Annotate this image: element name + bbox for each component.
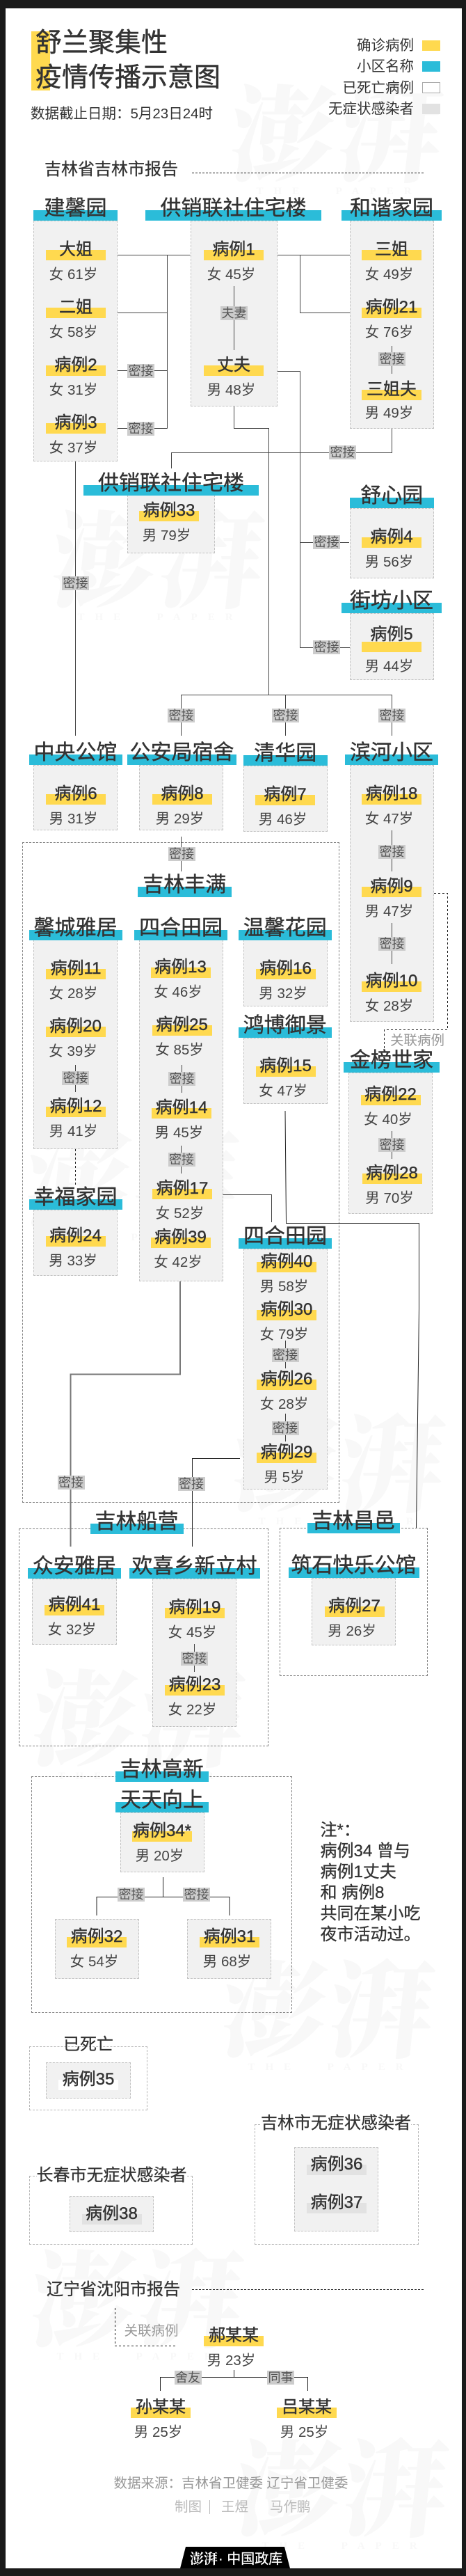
- case: 病例29: 男 5岁: [264, 1469, 305, 1485]
- connector: 供销联社 down to third row: [181, 406, 392, 736]
- label 吉林市无症状感染者: 吉林市无症状感染者: [261, 2113, 411, 2133]
- box: 公安局宿舍: [139, 765, 223, 830]
- case: 二姐: 二姐: [59, 298, 93, 317]
- case: 病例24: [46, 1226, 106, 1269]
- case: 病例13: 病例13: [154, 958, 207, 976]
- case: 病例1: 病例1: [212, 240, 255, 259]
- case: 二姐: 女 58岁: [49, 324, 97, 340]
- tag 夫妻: 夫妻: [221, 306, 246, 320]
- header: 吉林昌邑: 吉林昌邑: [312, 1509, 395, 1533]
- case: 病例28: 病例28: [366, 1164, 418, 1183]
- case: 病例13: 女 46岁: [154, 984, 202, 999]
- box: 幸福家园: [33, 1210, 118, 1276]
- box: 病例38: [70, 2195, 154, 2232]
- case: 丈夫: 男 48岁: [207, 382, 255, 398]
- data source: 数据来源：吉林省卫健委 辽宁省卫健委: [114, 2476, 348, 2491]
- case: 病例15: [256, 1057, 316, 1099]
- header: 馨城雅居: 馨城雅居: [33, 916, 117, 940]
- case: 病例33: [139, 501, 199, 543]
- case: 病例20: 女 39岁: [49, 1043, 97, 1059]
- case: 病例2: [46, 356, 106, 398]
- case: 病例31: 男 68岁: [203, 1953, 251, 1970]
- tag 密接: 密接: [128, 364, 153, 378]
- note: 病例1丈夫: [320, 1863, 396, 1881]
- case: 病例38 asymptomatic: 病例38: [86, 2204, 138, 2223]
- case: 病例16: [256, 959, 316, 1002]
- case: 病例4: 男 56岁: [365, 554, 413, 569]
- dotted rule: [192, 2289, 424, 2290]
- case: 病例34*: 病例34*: [133, 1821, 191, 1840]
- case: 病例30: 女 79岁: [260, 1327, 308, 1342]
- connector: 馨城雅居 to 幸福家园: [75, 1149, 77, 1185]
- title: 疫情传播示意图: [35, 63, 220, 92]
- case: 病例12: [46, 1097, 106, 1139]
- case: 病例23: 女 22岁: [168, 1701, 216, 1718]
- box: 滨河小区: [350, 765, 434, 1022]
- tag 密接: 密接: [380, 709, 405, 722]
- legend: 小区名称: [357, 58, 414, 74]
- box: 金榜世家: [348, 1073, 433, 1214]
- case: 病例15: 病例15: [259, 1057, 312, 1075]
- header: 天天向上: 天天向上: [120, 1789, 204, 1812]
- legend: 确诊病例: [357, 38, 414, 54]
- box: 中央公馆: [33, 765, 118, 830]
- note: 注*：: [320, 1821, 360, 1840]
- case: 病例18: [362, 784, 421, 827]
- case: 病例6: 男 31岁: [49, 811, 97, 827]
- tag 密接: 密接: [380, 937, 405, 951]
- footer tab: 澎湃: [190, 2547, 218, 2568]
- header: 滨河小区: 滨河小区: [350, 741, 433, 764]
- header: 幸福家园: 幸福家园: [33, 1186, 117, 1209]
- header: 建馨园: 建馨园: [45, 197, 107, 220]
- credits: [175, 2497, 314, 2517]
- tag 密接: 密接: [330, 445, 355, 459]
- tag 密接: 密接: [63, 1071, 88, 1085]
- tag 密接: 密接: [182, 1652, 207, 1666]
- header: 清华园: 清华园: [254, 742, 316, 765]
- case: 郝某某: [204, 2325, 264, 2369]
- case: 病例18: 病例18: [366, 784, 417, 803]
- case: 病例29: 病例29: [261, 1443, 312, 1462]
- case: 病例34*: [132, 1821, 192, 1865]
- header: 吉林高新: 吉林高新: [120, 1758, 204, 1781]
- note: 病例34 曾与: [320, 1842, 410, 1860]
- box: 天天向上: [120, 1812, 204, 1872]
- case: 病例17: 病例17: [156, 1179, 208, 1198]
- connector: 建馨园 to 中央公馆: [75, 461, 77, 736]
- case: 病例19: [165, 1597, 225, 1641]
- case: 病例22: 女 40岁: [364, 1112, 412, 1128]
- tag 密接: 密接: [273, 1421, 298, 1435]
- case: 病例12: 男 41岁: [49, 1123, 97, 1139]
- connector: 关联病例 滨河 to 金榜世家: [384, 894, 448, 1049]
- case: 病例41: [45, 1594, 104, 1638]
- box: 建馨园: [33, 221, 118, 461]
- case: 病例11: 女 28岁: [49, 986, 97, 1002]
- header: 供销联社住宅楼 2: 供销联社住宅楼: [98, 472, 244, 495]
- note: 和 病例8: [320, 1883, 385, 1902]
- connector: 关联病例 沈阳: [115, 2308, 175, 2346]
- case: 病例31: [200, 1927, 259, 1971]
- section heading: 吉林: 吉林省吉林市报告: [45, 160, 178, 179]
- case: 病例6: 病例6: [54, 784, 97, 803]
- case: 病例39: [151, 1228, 211, 1270]
- case: 病例13: [151, 958, 211, 999]
- connector: 病例34 to 病例32 and 31: [97, 1877, 230, 1915]
- tag 密接: 密接: [314, 640, 339, 654]
- case: 病例16: 病例16: [259, 959, 312, 978]
- case: 病例26: 女 28岁: [260, 1396, 308, 1412]
- tag 密接: 密接: [169, 1153, 194, 1167]
- case: 病例20: 病例20: [49, 1017, 102, 1036]
- header: 和谐家园: 和谐家园: [350, 197, 433, 220]
- box: 筑石快乐公馆: [312, 1578, 396, 1645]
- connector: 病例29 to 欢喜乡新立村: [192, 1459, 240, 1547]
- box: 病例31: [187, 1918, 271, 1979]
- case: 病例27: 病例27: [328, 1597, 380, 1615]
- tag 密接: 密接: [58, 1476, 83, 1490]
- tag 密接: 密接: [118, 1888, 143, 1902]
- case: 病例12: 病例12: [50, 1097, 102, 1115]
- connector: 公安局宿舍 to 吉林丰满: [181, 837, 182, 871]
- case: 病例2: 病例2: [54, 356, 97, 374]
- case: 病例28: [362, 1163, 421, 1208]
- case: 病例25: 病例25: [156, 1015, 208, 1034]
- case: 病例7: 病例7: [264, 785, 307, 803]
- case: 病例33: 病例33: [143, 501, 195, 519]
- watermark 1: THE PAPER: [256, 186, 422, 197]
- watermark 2: THE PAPER: [77, 612, 243, 623]
- box: 众安雅居: [32, 1579, 117, 1644]
- case: 吕某某: 吕某某: [282, 2397, 332, 2417]
- case: 丈夫: 丈夫: [217, 356, 250, 374]
- container: 已死亡: [29, 2046, 147, 2110]
- container: 吉林船营: [18, 1528, 268, 1746]
- case: 病例8: [152, 784, 212, 827]
- tag 密接: 密接: [380, 845, 405, 859]
- case: 病例20: [46, 1017, 106, 1059]
- case: 病例30: [257, 1299, 316, 1343]
- case: 大姐: [46, 240, 106, 283]
- case: 病例21: 女 76岁: [365, 324, 413, 340]
- case: 病例6: [46, 784, 106, 827]
- case: 病例14: [152, 1098, 211, 1141]
- case: 孙某某: 男 25岁: [134, 2424, 182, 2440]
- case: 三姐夫: 男 49岁: [365, 405, 413, 421]
- case: 病例27: 男 26岁: [328, 1623, 376, 1639]
- case: 病例39: 病例39: [154, 1228, 207, 1246]
- case: 病例32: [67, 1927, 127, 1971]
- case: 病例28: 男 70岁: [365, 1190, 414, 1206]
- case: 三姐: 三姐: [375, 240, 408, 259]
- tag 密接: 密接: [380, 352, 405, 366]
- tag 密接: 密接: [273, 1348, 298, 1361]
- credits: 王煜: [221, 2499, 248, 2515]
- tag 密接: 密接: [380, 1138, 405, 1152]
- case: 孙某某: [131, 2397, 191, 2442]
- case: 病例34*: 男 20岁: [136, 1847, 184, 1864]
- legend: 无症状感染者: [328, 101, 414, 117]
- header: 清华园: [243, 741, 328, 766]
- case: 病例19: 女 45岁: [168, 1625, 216, 1640]
- case: 病例25: [152, 1015, 212, 1058]
- case: 孙某某: 孙某某: [136, 2397, 186, 2417]
- connector: 鸿博御景 to 吉林昌邑: [285, 1111, 419, 1528]
- case: 郝某某: 郝某某: [209, 2326, 259, 2344]
- header: 四合田园 lower: 四合田园: [243, 1225, 327, 1248]
- credits: 制图: [175, 2499, 202, 2515]
- header: 街坊小区: 街坊小区: [350, 589, 433, 613]
- case: 病例41: 女 32岁: [48, 1622, 96, 1637]
- case: 大姐: 女 61岁: [49, 267, 97, 283]
- case: 病例4: [362, 528, 421, 569]
- case: 病例16: 男 32岁: [259, 986, 307, 1002]
- case: 吕某某: 男 25岁: [280, 2424, 328, 2440]
- watermark 4: THE PAPER: [258, 1516, 424, 1527]
- header: 金榜世家: 金榜世家: [350, 1049, 433, 1072]
- title: 舒兰聚集性: [35, 29, 168, 58]
- credits: 马作鹏: [270, 2499, 311, 2515]
- case: 病例40: 病例40: [261, 1251, 312, 1271]
- box: 温馨花园: [243, 940, 328, 1006]
- case: 病例23: 病例23: [169, 1675, 220, 1694]
- case: 病例10: 女 28岁: [365, 998, 413, 1014]
- case: 病例5: 男 44岁: [365, 658, 413, 674]
- case: 病例33: 男 79岁: [143, 528, 191, 543]
- case: 病例24: 病例24: [49, 1226, 102, 1245]
- box: 病例35: [46, 2062, 131, 2099]
- case: 三姐: 女 49岁: [365, 267, 413, 283]
- case: 病例24: 男 33岁: [49, 1253, 97, 1269]
- box: 舒心园: [350, 508, 434, 578]
- case: 病例21: 病例21: [366, 298, 417, 317]
- case: 病例1: [204, 240, 264, 283]
- box: 欢喜乡新立村: [152, 1579, 236, 1726]
- case: 病例29: [257, 1442, 316, 1487]
- case: 病例23: [165, 1675, 225, 1719]
- label 长春市无症状感染者: 长春市无症状感染者: [36, 2166, 186, 2185]
- title highlight: [31, 31, 50, 90]
- label 已死亡: 已死亡: [63, 2035, 113, 2053]
- case: 病例14: 病例14: [156, 1098, 207, 1117]
- case: 病例32: 病例32: [71, 1927, 122, 1946]
- container: 吉林高新: [31, 1776, 292, 2013]
- header: 中央公馆: 中央公馆: [33, 741, 117, 764]
- case: 病例3: 女 37岁: [49, 440, 97, 456]
- box: 馨城雅居: [33, 940, 118, 1149]
- case: 病例36 asymptomatic: 病例36: [311, 2155, 362, 2173]
- case: 病例22: [360, 1084, 420, 1129]
- label 关联病例 滨河: 关联病例: [390, 1033, 444, 1048]
- watermark 7: THE PAPER: [56, 2351, 223, 2362]
- box: 和谐家园: [350, 221, 434, 429]
- case: 三姐: [362, 240, 421, 283]
- tag 密接: 密接: [184, 1888, 209, 1902]
- case: 病例3: [46, 413, 106, 456]
- title: [35, 29, 220, 92]
- connector: inside boxes: [75, 286, 392, 1672]
- label 关联病例 沈阳: 关联病例: [124, 2323, 179, 2339]
- note: 夜市活动过。: [320, 1925, 420, 1944]
- box: 供销联社: [191, 221, 278, 406]
- case: 病例15: 女 47岁: [259, 1083, 307, 1099]
- case: 大姐: 大姐: [59, 240, 93, 259]
- box: 病例36 37: [294, 2147, 378, 2231]
- case: 郝某某: 男 23岁: [207, 2353, 255, 2368]
- case: 病例8: 男 29岁: [156, 811, 204, 827]
- tag 密接: 密接: [128, 422, 153, 436]
- case: 病例35 deceased: 病例35: [63, 2070, 114, 2088]
- tag 密接: 密接: [168, 709, 193, 722]
- tag 密接: 密接: [179, 1477, 204, 1491]
- connector: 和谐家园 to 病例33: [171, 429, 392, 468]
- case: 病例37 asymptomatic: 病例37: [311, 2192, 362, 2212]
- case: 病例3: 病例3: [54, 413, 97, 432]
- case: 病例7: [255, 785, 315, 827]
- case: 吕某某: [277, 2397, 337, 2442]
- case: 病例1: 女 45岁: [207, 267, 255, 283]
- case: 病例11: [46, 959, 106, 1002]
- header: 舒心园: 舒心园: [360, 484, 423, 507]
- connector: 郝某某 to 孙某某 and 吕某某: [160, 2370, 307, 2391]
- case: 病例14: 男 45岁: [155, 1125, 203, 1141]
- data date: 数据截止日期：5月23日24时: [31, 106, 213, 122]
- case: 病例2: 女 31岁: [49, 382, 97, 398]
- case: 三姐夫: 三姐夫: [367, 380, 417, 399]
- watermark 5: THE PAPER: [58, 1771, 224, 1782]
- watermark 8: THE PAPER: [262, 2541, 428, 2552]
- container: 吉林市无症状感染者: [255, 2124, 419, 2245]
- case: 病例11: 病例11: [51, 959, 101, 978]
- case: 病例26: 病例26: [261, 1370, 312, 1389]
- header: 吉林丰满: 吉林丰满: [143, 874, 226, 896]
- box: 供销联社 病例33: [127, 495, 214, 553]
- case: 病例5: [362, 625, 421, 674]
- tag 密接: 密接: [169, 847, 194, 861]
- tag 舍友: 舍友: [175, 2371, 200, 2385]
- case: 病例31: 病例31: [204, 1927, 255, 1946]
- case: 病例17: 女 52岁: [156, 1206, 204, 1222]
- case: 病例17: [152, 1179, 212, 1222]
- case: 病例21: [362, 298, 421, 340]
- watermark 6: THE PAPER: [248, 2062, 414, 2073]
- connector: 四合田园 to 四合田园 lower: [223, 1194, 271, 1222]
- case: 病例8: 病例8: [161, 784, 204, 803]
- case: 病例9: [362, 877, 421, 919]
- header: 鸿博御景: 鸿博御景: [243, 1013, 327, 1037]
- header: 供销联社住宅楼: 供销联社住宅楼: [160, 197, 306, 220]
- watermark 3: THE PAPER: [51, 1232, 218, 1243]
- case: 病例25: 女 85岁: [155, 1041, 204, 1058]
- case: 病例5: 病例5: [370, 625, 413, 644]
- case: 病例27: [324, 1596, 384, 1641]
- box: 街坊小区: [350, 613, 434, 680]
- note: 共同在某小吃: [320, 1904, 420, 1923]
- header: 舒心园: [349, 484, 434, 508]
- box: 清华园: [243, 766, 328, 831]
- case: 丈夫: [204, 356, 264, 398]
- tag 密接: 密接: [63, 576, 88, 590]
- header: 四合田园: 四合田园: [139, 916, 223, 940]
- case: 病例22: 病例22: [364, 1085, 417, 1104]
- container: 吉林丰满: [22, 842, 339, 1503]
- footer tab: · 中国政库: [218, 2552, 282, 2567]
- case: 病例9: 男 47岁: [365, 903, 413, 919]
- case: 病例26: [257, 1369, 316, 1414]
- container: 吉林昌邑: [280, 1528, 427, 1676]
- box: 四合田园 lower: [243, 1249, 328, 1490]
- header: 筑石快乐公馆: 筑石快乐公馆: [291, 1554, 416, 1577]
- box: 鸿博御景: [243, 1038, 328, 1104]
- legend: [328, 38, 440, 117]
- section heading: 辽宁: 辽宁省沈阳市报告: [47, 2280, 180, 2299]
- case: 病例19: 病例19: [169, 1598, 220, 1616]
- connector: 病例1 to 和谐家园: [278, 255, 350, 313]
- header: 众安雅居: 众安雅居: [33, 1555, 116, 1578]
- case: 病例10: [362, 972, 421, 1014]
- case: 病例9: 病例9: [370, 877, 413, 895]
- footer tab: [180, 2547, 290, 2568]
- tag 密接: 密接: [314, 535, 339, 549]
- connector: 丈夫 to 舒心园 and 街坊小区: [278, 372, 350, 647]
- case: 病例4: 病例4: [370, 528, 413, 546]
- case: 病例18: 女 47岁: [365, 811, 413, 827]
- header: 吉林船营: 吉林船营: [95, 1510, 178, 1533]
- box: 病例32: [54, 1918, 139, 1979]
- container: 长春市无症状感染者: [29, 2176, 193, 2245]
- case: 病例32: 女 54岁: [70, 1953, 118, 1970]
- case: 病例40: [257, 1251, 316, 1295]
- legend: 已死亡病例: [342, 80, 414, 96]
- tag 密接: 密接: [273, 709, 298, 722]
- note: [320, 1820, 420, 1945]
- tag 同事: 同事: [268, 2371, 294, 2385]
- case: 二姐: [46, 298, 106, 340]
- case: 病例41: 病例41: [49, 1595, 100, 1613]
- case: 病例39: 女 42岁: [154, 1254, 202, 1270]
- connector: 建馨园 to 病例1: [118, 255, 191, 429]
- box: 四合田园: [139, 940, 223, 1281]
- case: 病例40: 男 58岁: [260, 1278, 308, 1295]
- tag 密接: 密接: [170, 1072, 195, 1086]
- header: 欢喜乡新立村: 欢喜乡新立村: [132, 1555, 257, 1578]
- case: 病例30: 病例30: [261, 1300, 312, 1318]
- case: 病例7: 男 46岁: [259, 812, 307, 827]
- header: 公安局宿舍: 公安局宿舍: [129, 741, 234, 764]
- case: 三姐夫: [362, 380, 421, 421]
- connector: 四合田园 to 众安雅居: [71, 1281, 180, 1547]
- case: 病例10: 病例10: [366, 972, 417, 990]
- header: 温馨花园: 温馨花园: [243, 916, 327, 940]
